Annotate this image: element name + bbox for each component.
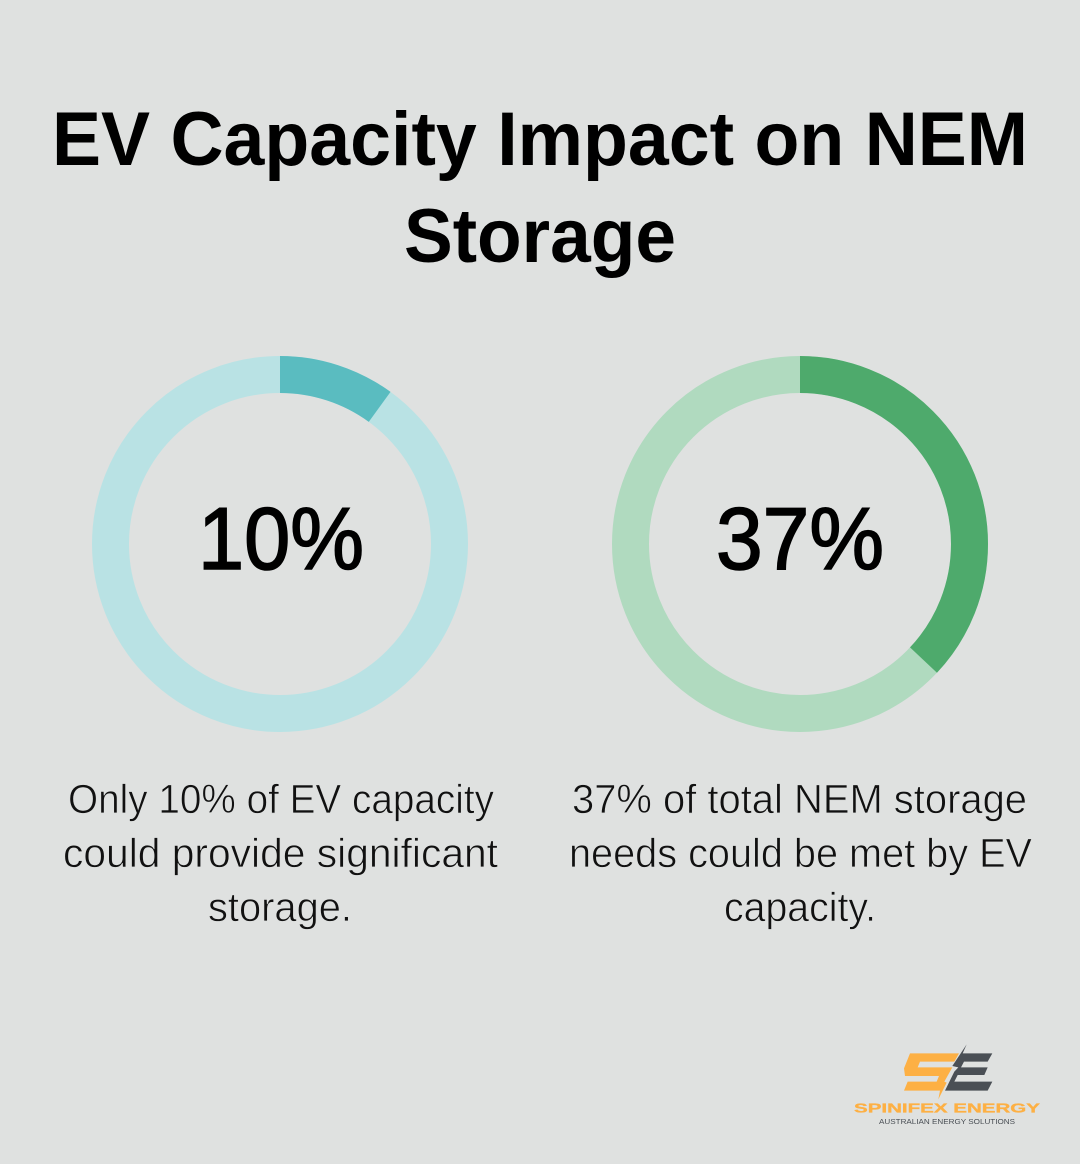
value: 10%: 10% [198,489,364,588]
title [52,97,1028,279]
brand name: SPINIFEX ENERGY [854,1102,1041,1116]
icon: SE lightning mark [904,1044,992,1099]
description: 37%: capacity. [724,884,876,930]
panel: 37% of NEM storage [569,374,1033,930]
description: 10%: storage. [208,884,352,930]
description: 10%: could provide significant [63,830,499,876]
title: Storage [404,194,676,279]
description: 37%: needs could be met by EV [569,830,1033,876]
donut chart: 37% [630,374,970,714]
donut chart: 10% [110,374,450,714]
tagline: AUSTRALIAN ENERGY SOLUTIONS [879,1117,1015,1126]
description: 10% [63,776,499,930]
value: 37%: 37% [716,489,884,588]
panel: 10% of EV capacity [63,374,499,930]
description: 10%: Only 10% of EV capacity [68,776,494,822]
logo: Spinifex Energy [854,1044,1041,1126]
description: 37% [569,776,1033,930]
title: EV Capacity Impact on NEM [52,97,1028,182]
description: 37%: 37% of total NEM storage [572,776,1027,822]
